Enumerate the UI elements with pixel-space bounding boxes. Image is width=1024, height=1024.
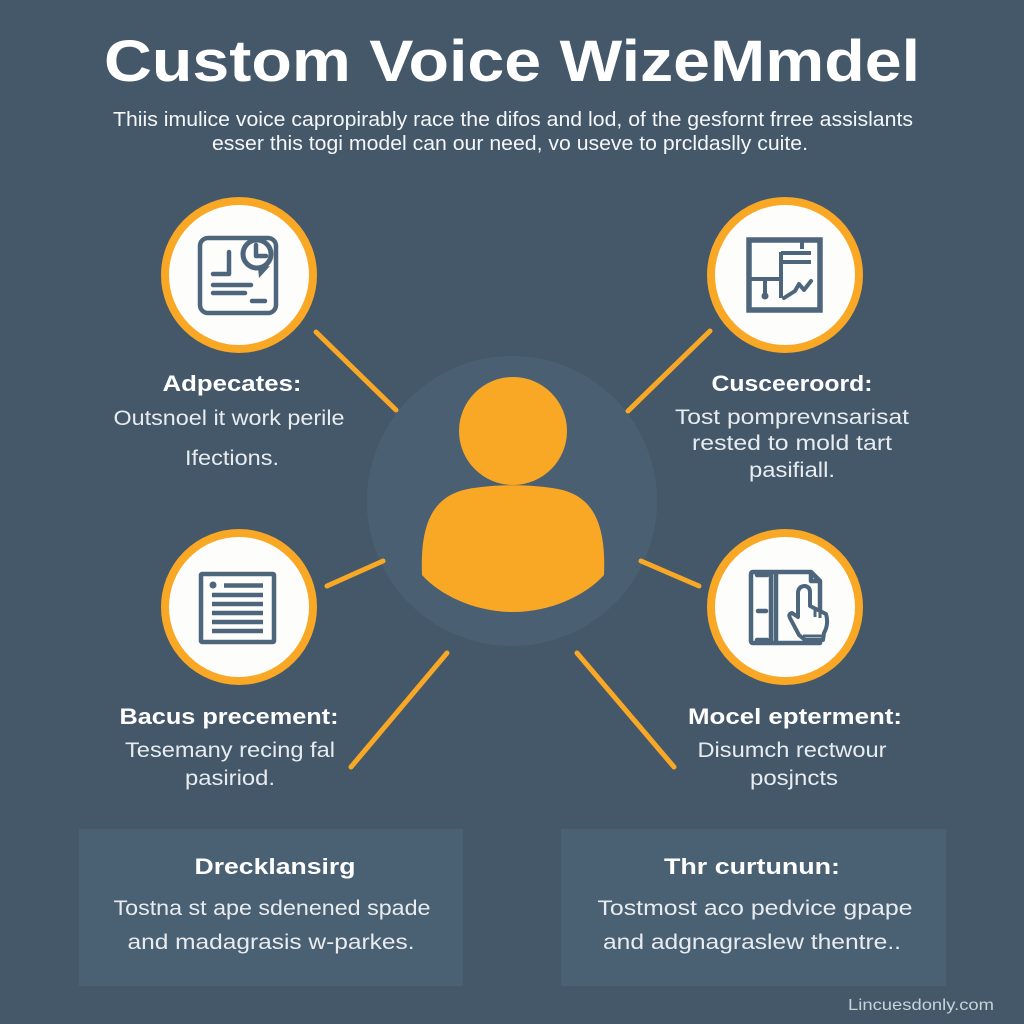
- description: Disumch rectwour: [698, 739, 887, 762]
- icon: document with clock: [165, 201, 313, 349]
- description: Tesemany recing fal: [125, 739, 335, 762]
- heading: Cusceeroord:: [712, 371, 872, 396]
- description: Ifections.: [185, 447, 279, 470]
- connector lines: [316, 331, 710, 767]
- description: and adgnagraslew thentre..: [603, 931, 901, 954]
- description: pasifiall.: [749, 459, 835, 482]
- panel: bottom left box: [79, 829, 463, 986]
- description: [698, 739, 887, 790]
- description: [114, 407, 344, 470]
- central person icon: [367, 356, 657, 646]
- description: [125, 739, 335, 790]
- description: Outsnoel it work perile: [114, 407, 344, 430]
- heading: Bacus precement:: [120, 704, 338, 729]
- intro text: [113, 109, 913, 155]
- watermark: Lincuesdonly.com: [848, 997, 994, 1014]
- title: Custom Voice WizeMmdel: [104, 29, 920, 94]
- panel: bottom left item: [120, 533, 338, 790]
- description: and madagrasis w-parkes.: [128, 931, 414, 954]
- icon: text document: [165, 533, 313, 681]
- description: [114, 897, 430, 954]
- icon: chart layout: [711, 201, 859, 349]
- panel: top left item: [114, 201, 344, 470]
- intro text: Thiis imulice voice capropirably race the difos and lod, of the gesfornt frree assislants: [113, 109, 913, 131]
- panel: top right item: [675, 201, 909, 482]
- panel: bottom right box: [561, 829, 946, 986]
- intro text: esser this togi model can our need, vo useve to prcldaslly cuite.: [212, 133, 808, 155]
- description: rested to mold tart: [692, 432, 892, 455]
- description: pasiriod.: [185, 767, 275, 790]
- description: posjncts: [750, 767, 838, 790]
- description: Tost pomprevnsarisat: [675, 406, 909, 429]
- panel: bottom right item: [688, 533, 902, 790]
- heading: Drecklansirg: [194, 854, 356, 879]
- heading: Mocel epterment:: [688, 704, 902, 729]
- description: [675, 406, 909, 482]
- heading: Thr curtunun:: [664, 854, 840, 879]
- description: Tostmost aco pedvice gpape: [598, 897, 912, 920]
- description: Tostna st ape sdenened spade: [114, 897, 430, 920]
- icon: book with pointing hand: [711, 533, 859, 681]
- heading: Adpecates:: [162, 371, 302, 396]
- description: [598, 897, 912, 954]
